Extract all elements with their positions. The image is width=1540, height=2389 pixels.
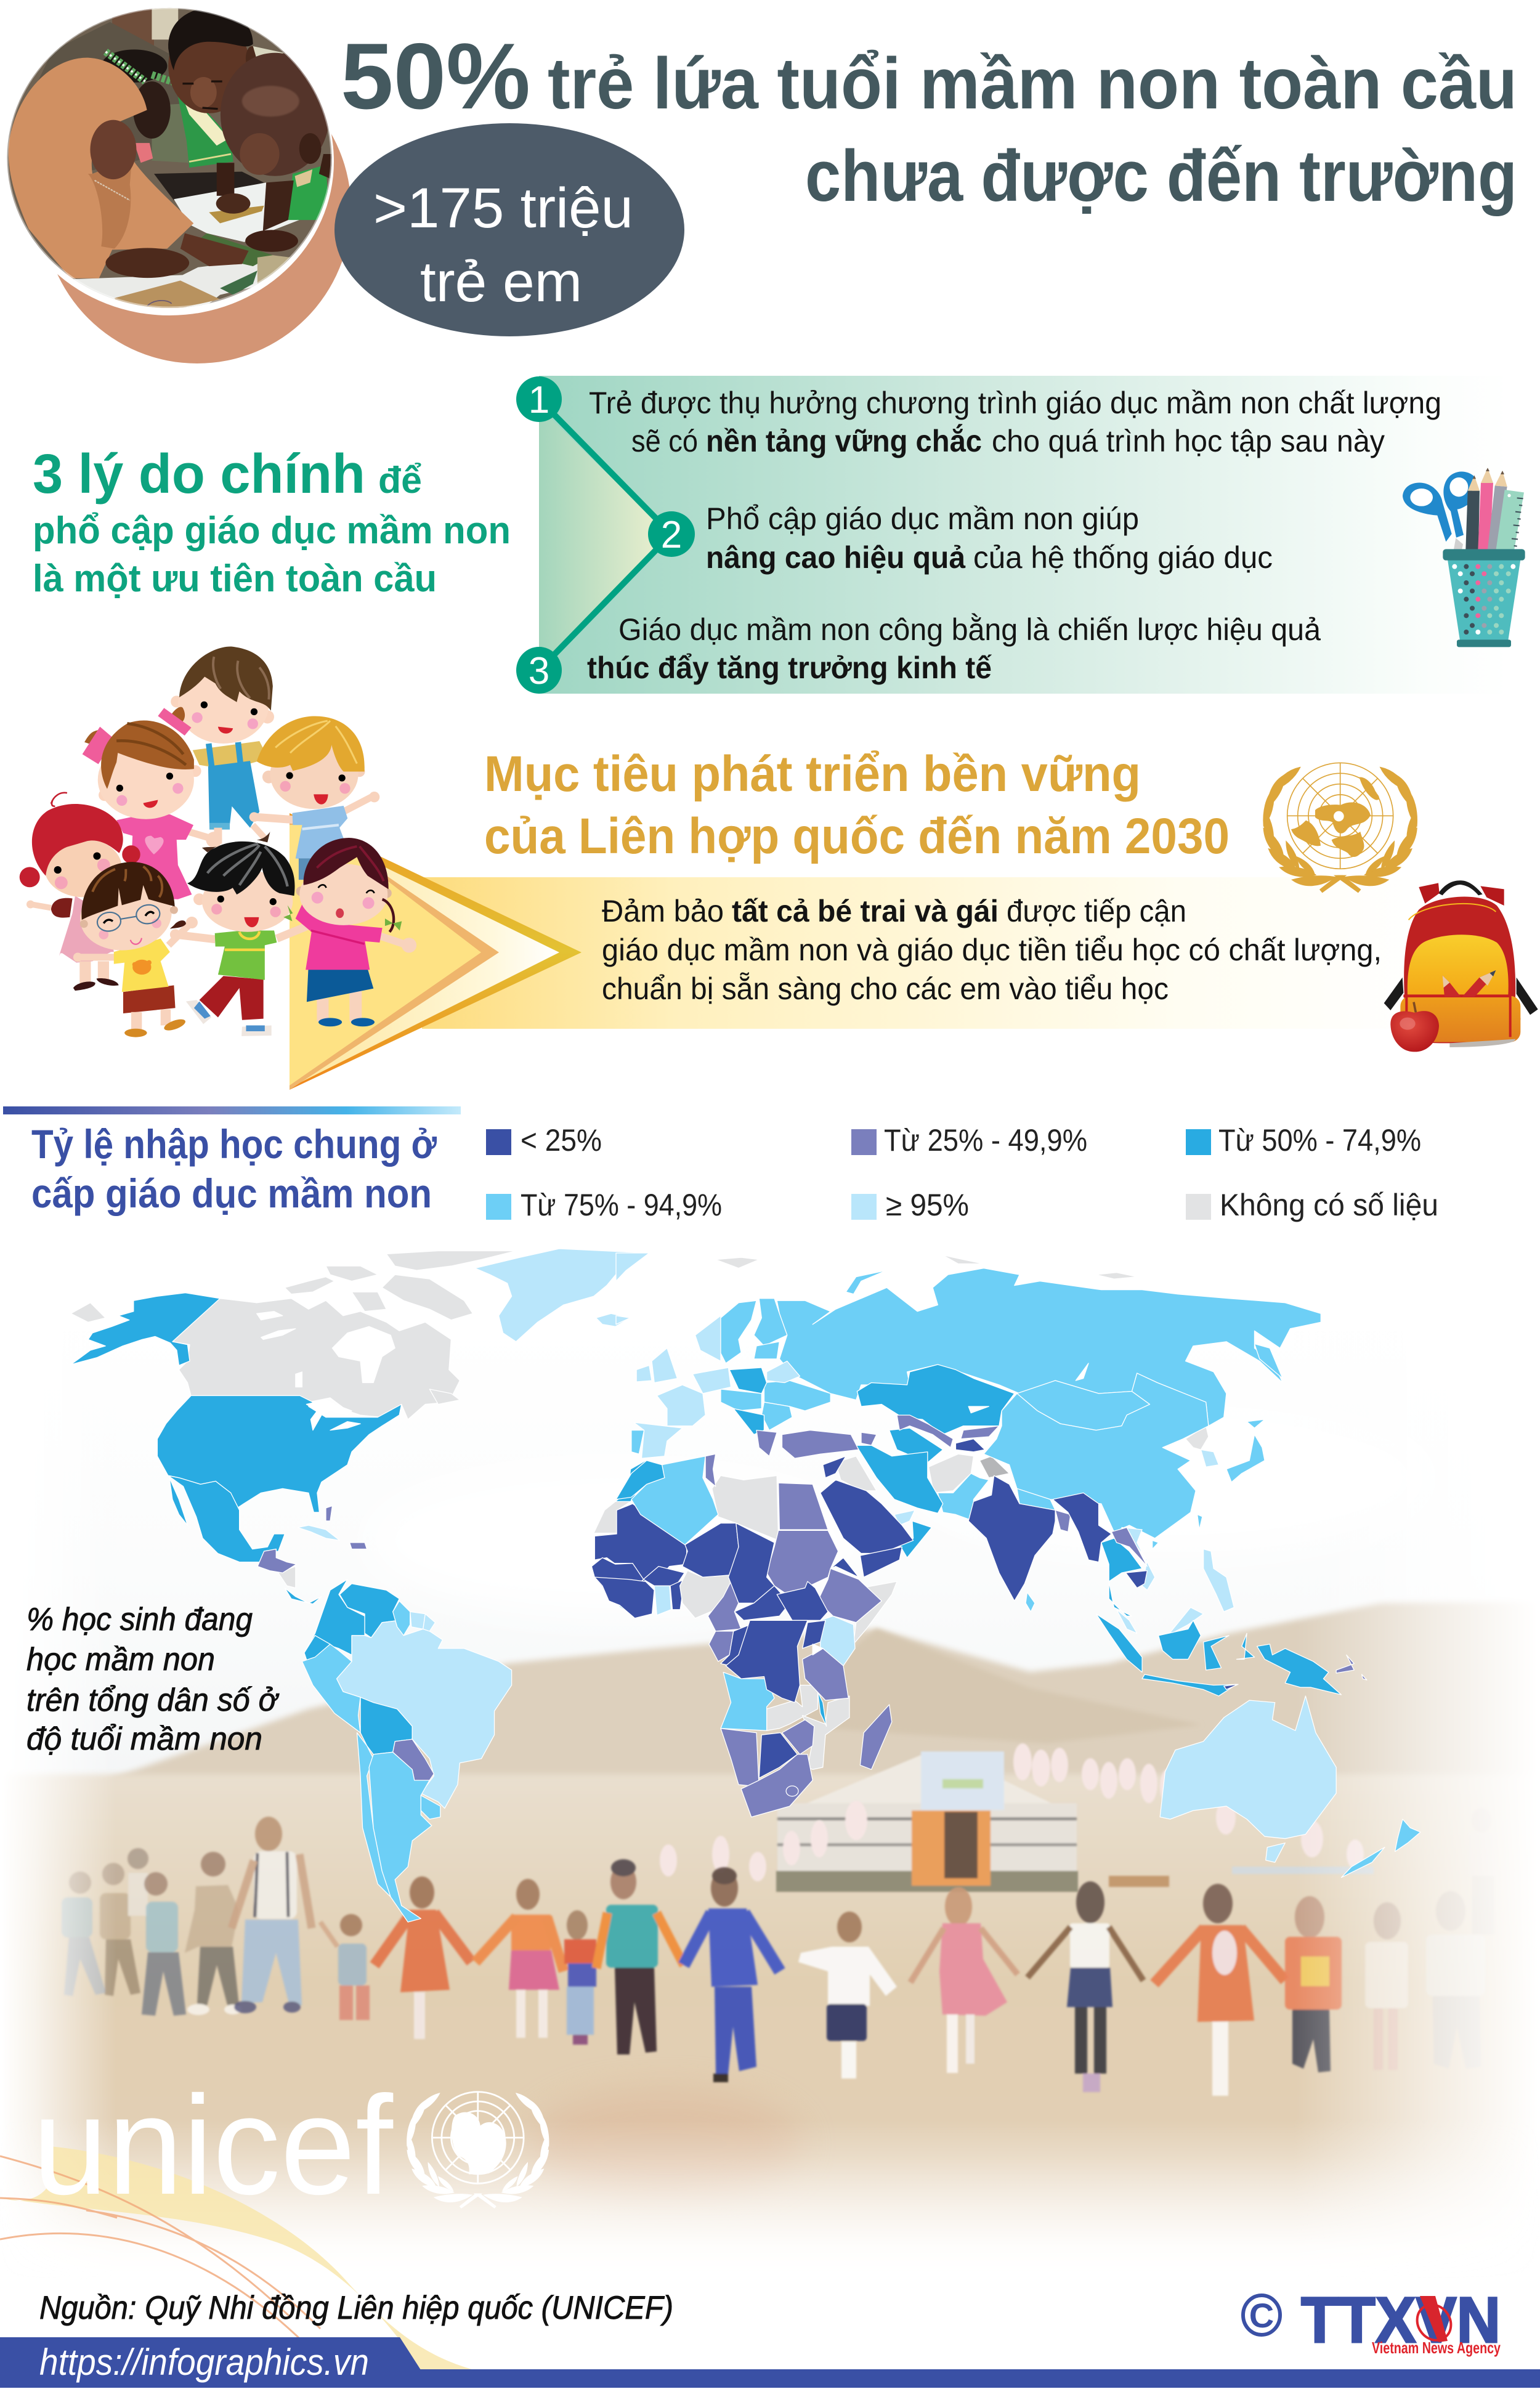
girl in magenta shirt xyxy=(296,838,416,1026)
goal text xyxy=(602,894,1382,1006)
boy in green shirt xyxy=(170,842,318,1036)
paper sheets xyxy=(174,182,299,242)
reason 3 text: Giáo dục mầm non công bằng là chiến lược hiệu quả xyxy=(618,612,1321,647)
background photo: yurt camp and children on the steppe xyxy=(0,1294,1540,2389)
girl in pink dress xyxy=(83,707,222,899)
logo: TTXVN: C xyxy=(1249,2296,1274,2335)
world map choropleth xyxy=(71,1249,1420,1922)
emblem xyxy=(407,2092,549,2209)
heading: sustainable development goal: Mục tiêu phát triển bền vững xyxy=(484,746,1141,802)
child right xyxy=(288,165,330,220)
number 3 xyxy=(516,647,562,694)
logo: TTXVN: Vietnam News Agency xyxy=(1372,2338,1501,2357)
goal text: Đảm bảo xyxy=(602,894,724,928)
reason 1 text: nền tảng vững chắc xyxy=(706,424,982,458)
rule above map heading xyxy=(3,1106,461,1114)
reason 3 text: thúc đẩy tăng trưởng kinh tế xyxy=(587,651,992,685)
group of children holding hands xyxy=(62,1808,1497,2096)
legend item: 75 to 94.9%: Từ 75% - 94,9% xyxy=(521,1188,722,1222)
illustration: group of cartoon children xyxy=(20,647,416,1037)
reason 1 text: cho quá trình học tập sau này xyxy=(992,424,1385,458)
girl in headscarf xyxy=(9,58,193,278)
note: percent of pupils: % học sinh đang xyxy=(26,1602,253,1637)
logo: TTXVN: TTXVN xyxy=(1301,2284,1501,2356)
reason 1 text: Trẻ được thụ hưởng chương trình giáo dục mầm non chất lượng xyxy=(589,386,1441,420)
edge fades xyxy=(0,1324,117,2310)
legend item: at least 95%: ≥ 95% xyxy=(886,1188,969,1222)
blonde boy xyxy=(249,716,379,880)
legend xyxy=(486,1123,1438,1222)
source: Nguồn: Quỹ Nhi đồng Liên hiệp quốc (UNICEF) xyxy=(39,2290,673,2326)
legend item: under 25% xyxy=(486,1123,602,1158)
number 2: 2 xyxy=(661,514,682,556)
badge: >175 triệu trẻ em: trẻ em xyxy=(420,251,582,314)
title xyxy=(341,24,1517,217)
icon: UN emblem xyxy=(1263,763,1417,892)
number 1: 1 xyxy=(529,379,549,421)
note: percent of pupils: độ tuổi mầm non xyxy=(26,1721,262,1757)
heading: 3 main reasons xyxy=(33,444,511,600)
legend item: under 25%: < 25% xyxy=(521,1123,602,1158)
photo: children studying xyxy=(0,0,351,363)
reason 2 text: nâng cao hiệu quả xyxy=(706,540,966,575)
reason 1 text: sẽ có xyxy=(631,424,698,458)
icon: pencil cup xyxy=(1403,468,1525,647)
number 2 xyxy=(648,511,695,557)
logo: UNICEF: unicef xyxy=(33,2067,394,2224)
note: percent of pupils: trên tổng dân số ở xyxy=(26,1682,279,1718)
reason 2 text: Phổ cập giáo dục mầm non giúp xyxy=(706,501,1139,536)
number 1 xyxy=(516,376,562,422)
legend item: at least 95% xyxy=(851,1188,969,1222)
heading: 3 main reasons: 3 lý do chính xyxy=(33,444,365,505)
balloons xyxy=(660,1743,1364,1881)
panel: SDG goal band and arrow xyxy=(290,813,1432,1090)
goal text: tất cả bé trai và gái xyxy=(732,894,999,928)
heading: 3 main reasons: để xyxy=(378,460,422,501)
red-haired girl xyxy=(20,793,140,991)
yurt xyxy=(776,1751,1374,1892)
note: percent of pupils xyxy=(26,1602,279,1757)
map: Americas and west Africa xyxy=(71,1249,687,1922)
reason 2 text xyxy=(706,501,1273,575)
badge: >175 triệu trẻ em xyxy=(334,123,684,336)
reason 2 text: của hệ thống giáo dục xyxy=(973,540,1273,575)
girl in yellow shirt with glasses xyxy=(73,862,198,1037)
background child xyxy=(101,49,167,83)
heading: enrolment rate xyxy=(31,1121,437,1216)
boy in overalls xyxy=(171,647,274,844)
heading: 3 main reasons: phổ cập giáo dục mầm non xyxy=(33,509,511,552)
heading: sustainable development goal xyxy=(484,746,1230,864)
goal text: giáo dục mầm non và giáo dục tiền tiểu học có chất lượng, xyxy=(602,933,1382,967)
legend item: 25 to 49.9%: Từ 25% - 49,9% xyxy=(884,1123,1087,1158)
heading: sustainable development goal: của Liên hợp quốc đến năm 2030 xyxy=(484,808,1230,864)
heading: 3 main reasons: là một ưu tiên toàn cầu xyxy=(33,558,437,600)
decorative swoosh bottom left xyxy=(0,2146,481,2372)
reason 3 text xyxy=(587,612,1321,685)
legend item: no data: Không có số liệu xyxy=(1220,1188,1438,1222)
note: percent of pupils: học mầm non xyxy=(26,1642,215,1677)
title: 50% xyxy=(341,24,530,129)
panel: three reasons xyxy=(516,376,1509,694)
child centre xyxy=(178,97,233,168)
goal text: chuẩn bị sẵn sàng cho các em vào tiểu học xyxy=(602,971,1169,1006)
heading: enrolment rate: cấp giáo dục mầm non xyxy=(31,1170,432,1216)
reason 1 text xyxy=(589,386,1441,458)
legend item: 50 to 74.9%: Từ 50% - 74,9% xyxy=(1218,1123,1421,1158)
arrow xyxy=(290,813,582,1090)
url: https://infographics.vn xyxy=(39,2342,369,2383)
map: Europe, Africa, Asia, Oceania xyxy=(616,1253,1420,1878)
number 3: 3 xyxy=(529,650,549,692)
icon: backpack and apple xyxy=(1384,880,1538,1052)
goal text: được tiếp cận xyxy=(1007,894,1186,928)
heading: enrolment rate: Tỷ lệ nhập học chung ở xyxy=(31,1121,437,1167)
badge: >175 triệu trẻ em: >175 triệu xyxy=(373,177,633,240)
connector line xyxy=(539,399,671,670)
footer bar xyxy=(0,2337,1540,2388)
